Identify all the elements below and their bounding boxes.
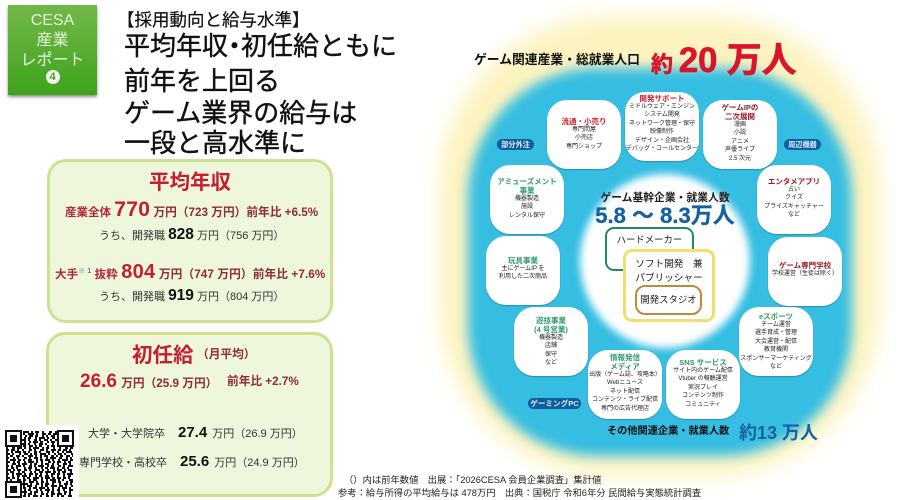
card: social media services: 実況プレイ	[688, 385, 718, 391]
card: game IP secondary development	[703, 100, 777, 169]
card: game IP secondary development: 二次展開	[725, 112, 755, 121]
card: amusement parlor business: 店舗	[545, 343, 557, 349]
footnote: reference: 参考：給与所得の平均給与は 478万円 出典：国税庁 令和6年分 民間給与実態統計調査	[338, 488, 701, 498]
card: toy business: 玩具事業	[508, 256, 538, 265]
heading: average annual income: 平均年収	[149, 171, 231, 194]
card: social media services: SNS サービス	[679, 358, 727, 367]
text: monthly average: （月平均）	[197, 348, 255, 361]
card: game IP secondary development: 小説	[734, 130, 746, 136]
card: amusement parlor business: 保守	[545, 352, 557, 358]
badge: CESA industry report 4: 産業	[36, 32, 68, 49]
card: social media services: Vtuber の報酬運営	[678, 376, 728, 382]
label: peripheral equipment	[784, 139, 821, 150]
text: starting salary figure: 26.6 万円（25.9 万円）	[80, 371, 217, 392]
card: information media: Webニュース	[607, 380, 643, 386]
card: esports: など	[770, 364, 782, 370]
card: amusement parlor business: (4 号営業)	[534, 325, 568, 334]
card: information media: メディア	[610, 362, 640, 371]
label: peripheral equipment: 周辺機器	[788, 140, 817, 149]
card: game vocational schools: 学校運営（生徒は除く）	[772, 271, 838, 277]
card: game IP secondary development: 漫画	[734, 122, 746, 128]
card: game vocational schools: ゲーム専門学校	[779, 261, 831, 270]
text: vocational and high school graduates: 専門学校・高校卒 25.6 万円（24.9 万円）	[79, 453, 305, 470]
card: game IP secondary development: ゲームIPの	[722, 103, 758, 112]
card: amusement business: 機器製造	[515, 196, 539, 202]
card: game IP secondary development: 声優ライブ	[725, 147, 755, 153]
card: esports: 大会運営・配信	[755, 339, 797, 345]
card: esports: チーム運営	[761, 322, 791, 328]
card: information media: 情報発信	[610, 353, 640, 362]
card: social media services	[666, 350, 740, 419]
box: development studios	[635, 285, 702, 315]
card: amusement parlor business: 機器製造	[539, 335, 563, 341]
QR code	[5, 425, 79, 498]
text: starting salary change: 前年比 +2.7%	[227, 375, 299, 388]
card: amusement business: アミューズメント	[497, 177, 557, 186]
card: information media: 出版（ゲーム誌、攻略本）	[589, 372, 661, 378]
card: toy business: 利用した二次商品	[499, 274, 547, 280]
card: entertainment apps: など	[788, 212, 800, 218]
card: social media services: サイト内のゲーム配信	[673, 368, 733, 374]
box: hardware makers	[605, 227, 694, 271]
card: distribution and retail: 専門問屋	[572, 127, 596, 133]
card: development support: デバッグ・コールセンター	[626, 146, 698, 152]
section label: 【採用動向と給与水準】	[117, 10, 310, 30]
box: hardware makers: ハードメーカー	[617, 234, 682, 245]
box: software developers and publishers: パブリッシャー	[635, 272, 703, 284]
card: amusement parlor business: など	[545, 360, 557, 366]
main title: 一段と高水準に	[124, 128, 306, 158]
figure: about 130,000 people: 約13 万人	[739, 423, 818, 443]
heading: total employment in game-related industries: ゲーム関連産業・総就業人口	[474, 52, 640, 67]
badge: CESA industry report 4: レポート	[20, 52, 84, 69]
text: industry overall: 産業全体 770 万円（723 万円）前年比 +6.5%	[65, 198, 318, 221]
card: game vocational schools	[768, 237, 842, 306]
main title	[124, 31, 397, 158]
text: developers overall: うち、開発職 828 万円（756 万円）	[99, 226, 284, 243]
card: social media services: コンテンツ制作	[682, 393, 724, 399]
figure: about 200,000 people: 約 20 万人	[651, 41, 796, 80]
box: development studios: 開発スタジオ	[640, 294, 697, 305]
card: entertainment apps: 占い	[788, 187, 800, 193]
card: information media: ネット配信	[610, 389, 640, 395]
card: toy business	[486, 236, 560, 305]
label: partial outsourcing: 部分外注	[501, 140, 530, 149]
text: major company developers: うち、開発職 919 万円（804 万円）	[99, 287, 284, 304]
main title: 前年を上回る	[124, 66, 280, 96]
panel: average annual income	[47, 159, 333, 323]
card: amusement business	[490, 165, 564, 234]
card: esports: スポンサーマーケティング	[740, 356, 812, 362]
card: amusement parlor business	[514, 307, 588, 376]
card: development support	[625, 92, 699, 161]
card: game IP secondary development: 2.5 次元	[729, 156, 751, 162]
card: amusement business: レンタル保守	[509, 213, 545, 219]
card: entertainment apps: プライズキャッチャー	[764, 204, 824, 210]
card: entertainment apps: クイズ	[785, 195, 803, 201]
heading: starting salary: 初任給	[132, 344, 194, 367]
card: information media: コンテンツ・ライブ配信	[592, 397, 658, 403]
card: entertainment apps: エンタメアプリ	[768, 177, 820, 186]
heading: core game companies employment: ゲーム基幹企業・就業人数	[600, 192, 730, 204]
card: distribution and retail: 流通・小売り	[562, 117, 606, 126]
heading: other related companies employment: その他関連企業・就業人数	[607, 426, 729, 437]
main title: ゲーム業界の給与は	[124, 98, 357, 128]
card: esports: 選手育成・管理	[755, 330, 797, 336]
badge: CESA industry report 4: 4	[49, 71, 56, 83]
text: major companies: 大手※ 1 抜粋 804 万円（747 万円）前年比 +7.6%	[55, 261, 325, 283]
card: amusement parlor business: 遊技事業	[536, 316, 566, 325]
card: amusement business: 施設	[521, 204, 533, 210]
text: university graduates: 大学・大学院卒 27.4 万円（26.9 万円）	[88, 424, 303, 441]
label: gaming PC: ゲーミングPC	[530, 399, 579, 408]
card: development support: ネットワーク管理・保守	[629, 121, 695, 127]
card: development support: 映像制作	[650, 129, 674, 135]
card: game IP secondary development: アニメ	[731, 139, 749, 145]
panel: starting salary	[46, 332, 333, 497]
box: software developers and publishers	[623, 249, 715, 322]
card: esports	[739, 307, 813, 376]
card: development support: システム開発	[644, 112, 680, 118]
box: software developers and publishers: ソフト開発 兼	[635, 259, 703, 270]
card: social media services: コミュニティ	[685, 402, 721, 408]
card: development support: デザイン・企画会社	[635, 138, 689, 144]
card: entertainment apps	[757, 165, 831, 234]
card: development support: ミドルウェア・エンジン	[629, 104, 695, 110]
main title: 平均年収・初任給ともに	[124, 31, 397, 61]
card: information media	[588, 350, 662, 419]
card: esports: eスポーツ	[759, 312, 793, 321]
card: toy business: 主にゲームIP を	[501, 266, 545, 272]
label: partial outsourcing	[497, 139, 534, 150]
card: distribution and retail: 専門ショップ	[566, 144, 602, 150]
figure: 58,000 to 83,000 people: 5.8 ～ 8.3万人	[595, 203, 735, 228]
card: esports: 教育機関	[764, 347, 788, 353]
card: distribution and retail	[547, 100, 621, 169]
card: amusement business: 事業	[520, 186, 534, 195]
badge: CESA industry report 4: CESA	[31, 12, 74, 29]
card: information media: 専門の広告代理店	[601, 406, 649, 412]
footnote: source: （）内は前年数値 出展：「2026CESA 会員企業調査」集計値	[344, 475, 601, 485]
card: distribution and retail: 小売店	[575, 135, 593, 141]
badge: CESA industry report 4	[8, 5, 97, 95]
card: development support: 開発サポート	[640, 94, 684, 103]
